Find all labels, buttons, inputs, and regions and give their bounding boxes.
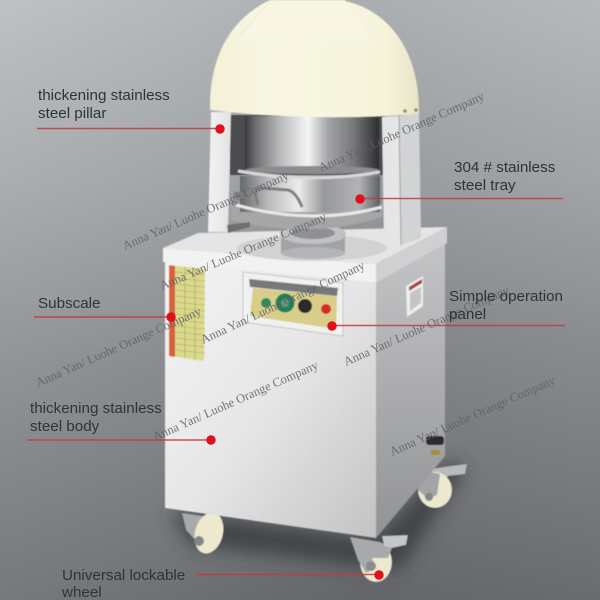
callout: thickening stainless steel body	[27, 400, 216, 445]
watermarks	[34, 89, 558, 459]
rear casters	[182, 464, 467, 557]
cabinet top plate	[163, 227, 447, 283]
watermarks: Anna Yan/ Luohe Orange Company	[342, 283, 512, 369]
callout: subscale	[34, 295, 176, 322]
watermarks: Anna Yan/ Luohe Orange Company	[158, 209, 329, 293]
front caster	[350, 535, 408, 582]
callout: universal lockable wheel	[61, 567, 384, 600]
callout: 304 stainless steel tray	[355, 159, 563, 204]
callout: simple operation panel	[327, 288, 565, 331]
subscale chart	[169, 265, 205, 361]
callout: thickening stainless steel body: thickening stainless	[30, 400, 162, 417]
centre spindle	[280, 224, 346, 259]
watermarks: Anna Yan/ Luohe Orange Company	[198, 258, 368, 347]
tray	[231, 171, 382, 229]
callout: thickening stainless steel pillar	[37, 87, 225, 134]
callout: 304 stainless steel tray: 304 # stainless	[454, 159, 556, 176]
callout: thickening stainless steel pillar: thickening stainless	[38, 87, 170, 104]
watermarks: Anna Yan/ Luohe Orange Company	[34, 304, 204, 390]
watermarks: Anna Yan/ Luohe Orange Company	[388, 373, 558, 459]
watermarks: Anna Yan/ Luohe Orange Company	[151, 358, 321, 444]
callout: thickening stainless steel pillar: steel pillar	[38, 105, 106, 122]
callout: subscale: Subscale	[38, 295, 100, 312]
steel drum	[230, 115, 385, 175]
machine illustration	[163, 0, 467, 582]
right pillar	[382, 113, 421, 245]
callout: simple operation panel: Simple operation	[449, 288, 563, 305]
cabinet body	[165, 244, 445, 538]
floor shadow	[170, 460, 465, 570]
callout: universal lockable wheel: Universal lockable	[62, 567, 185, 584]
rear valve	[426, 436, 444, 455]
callout: thickening stainless steel body: steel body	[30, 418, 100, 435]
watermarks: Anna Yan/ Luohe Orange Company	[317, 89, 487, 175]
callout: simple operation panel: panel	[449, 306, 486, 323]
left pillar	[208, 112, 231, 232]
control panel	[243, 272, 343, 336]
dome cover	[210, 0, 419, 117]
warning sticker	[406, 276, 423, 317]
watermarks: Anna Yan/ Luohe Orange Company	[121, 168, 291, 253]
callout: 304 stainless steel tray: steel tray	[454, 177, 516, 194]
